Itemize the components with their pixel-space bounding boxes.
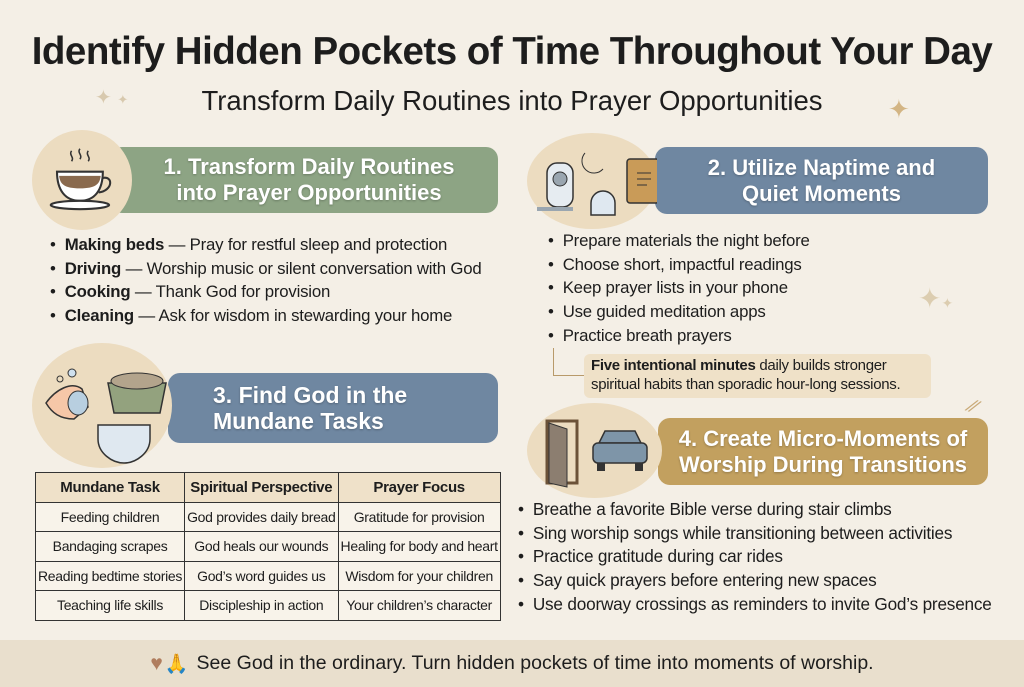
panel 4 bullets: Practice gratitude during car rides bbox=[533, 546, 783, 566]
table: mundane tasks: God provides daily bread bbox=[187, 509, 336, 525]
panel 2 bullets: Use guided meditation apps bbox=[563, 302, 766, 321]
panel 1 bullets: Making beds — Pray for restful sleep and protection bbox=[65, 235, 447, 254]
icon: washing hands, laundry, diaper bbox=[32, 343, 172, 468]
panel 4 header bbox=[658, 418, 988, 485]
footer banner: ♥ bbox=[150, 652, 163, 674]
panel 1 header: 1. Transform Daily Routines bbox=[164, 154, 454, 179]
icon: coffee cup bbox=[32, 130, 132, 230]
panel 4 bullets: Say quick prayers before entering new spaces bbox=[533, 570, 877, 590]
panel 2 header: 2. Utilize Naptime and bbox=[708, 154, 935, 180]
table: mundane tasks: Mundane Task bbox=[60, 479, 160, 496]
callout: five intentional minutes bbox=[553, 348, 931, 398]
panel 2 bullets: Choose short, impactful readings bbox=[563, 255, 802, 274]
panel 1 bullets: Cooking — Thank God for provision bbox=[65, 282, 330, 301]
table: mundane tasks: Your children’s character bbox=[346, 597, 492, 613]
panel 1 bullets bbox=[50, 235, 481, 325]
table: mundane tasks: God’s word guides us bbox=[197, 568, 325, 584]
footer banner bbox=[0, 640, 1024, 687]
table: mundane tasks: Feeding children bbox=[61, 509, 159, 525]
table: mundane tasks bbox=[35, 472, 501, 621]
footer banner: 🙏 bbox=[165, 654, 189, 674]
decorative rays: ⁄⁄ bbox=[967, 396, 980, 419]
panel 3 header: 3. Find God in the bbox=[213, 382, 407, 408]
icon: door and car bbox=[527, 403, 662, 498]
table: mundane tasks: Spiritual Perspective bbox=[190, 479, 332, 496]
panel 3 header: Mundane Tasks bbox=[213, 408, 384, 434]
panel 2 bullets: Keep prayer lists in your phone bbox=[563, 278, 788, 297]
panel 2 bullets bbox=[548, 231, 810, 345]
panel 1 header bbox=[110, 147, 498, 213]
table: mundane tasks: Wisdom for your children bbox=[345, 568, 493, 584]
panel 2 bullets: Prepare materials the night before bbox=[563, 231, 810, 250]
decorative sparkles: ✦ ✦ bbox=[95, 87, 128, 109]
panel 3 header bbox=[168, 373, 498, 443]
title: Identify Hidden Pockets of Time Throughout Your Day bbox=[32, 30, 992, 73]
table: mundane tasks: Teaching life skills bbox=[57, 597, 163, 613]
table: mundane tasks: Healing for body and heart bbox=[341, 538, 498, 554]
panel 1 bullets: Cleaning — Ask for wisdom in stewarding your home bbox=[65, 306, 452, 325]
text: ✦ bbox=[888, 94, 910, 124]
panel 4 bullets: Sing worship songs while transitioning between activities bbox=[533, 523, 952, 543]
table: mundane tasks: Prayer Focus bbox=[373, 479, 465, 496]
table: mundane tasks: God heals our wounds bbox=[194, 538, 328, 554]
footer banner: See God in the ordinary. Turn hidden pockets of time into moments of worship. bbox=[197, 652, 874, 674]
callout: five intentional minutes: Five intentional minutes daily builds stronger spiritual habits than sporadic hour-long sessions. bbox=[591, 357, 900, 393]
panel 2 header: Quiet Moments bbox=[742, 180, 901, 206]
table: mundane tasks: Bandaging scrapes bbox=[53, 538, 167, 554]
panel 4 header: Worship During Transitions bbox=[679, 452, 967, 476]
panel 2 header bbox=[655, 147, 988, 214]
panel 4 bullets bbox=[518, 499, 992, 614]
table: mundane tasks: Reading bedtime stories bbox=[38, 568, 182, 584]
panel 4 header: 4. Create Micro-Moments of bbox=[679, 426, 967, 450]
subtitle: Transform Daily Routines into Prayer Opportunities bbox=[201, 85, 823, 116]
table: mundane tasks: Discipleship in action bbox=[199, 597, 323, 613]
panel 4 bullets: Use doorway crossings as reminders to invite God’s presence bbox=[533, 594, 992, 614]
text: ✦✦ bbox=[918, 283, 953, 314]
panel 1 bullets: Driving — Worship music or silent conversation with God bbox=[65, 259, 481, 278]
table: mundane tasks: Gratitude for provision bbox=[354, 509, 485, 525]
panel 4 bullets: Breathe a favorite Bible verse during stair climbs bbox=[533, 499, 892, 519]
panel 1 header: into Prayer Opportunities bbox=[176, 180, 442, 205]
icon: baby monitor, moon, book bbox=[527, 133, 657, 229]
panel 2 bullets: Practice breath prayers bbox=[563, 326, 732, 345]
